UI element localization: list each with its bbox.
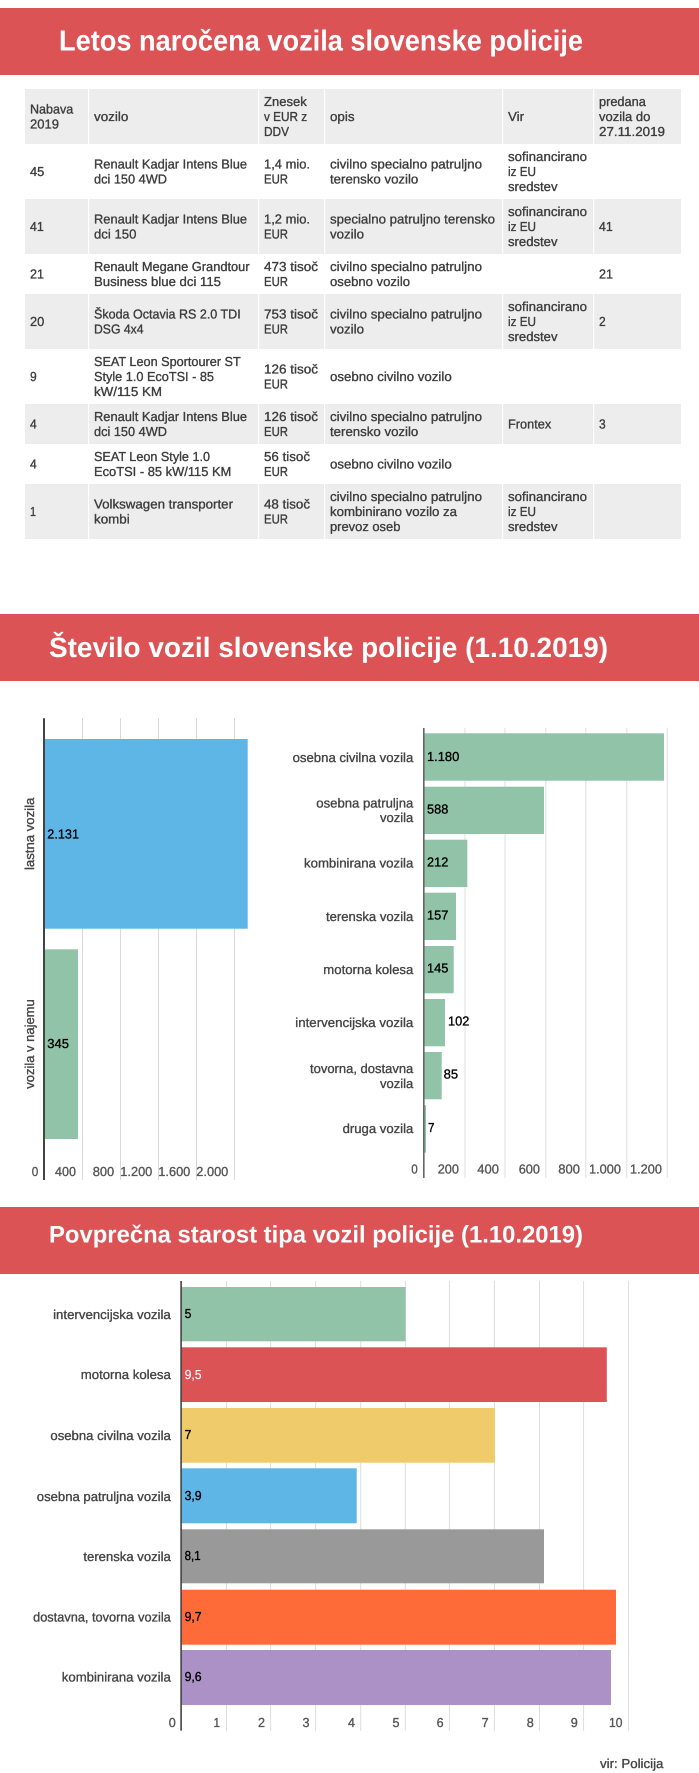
table row 7: 4 <box>30 456 37 472</box>
bar: terenska vozila: terenska vozila <box>326 909 414 924</box>
table row 4: sredstev <box>508 329 558 344</box>
bar: kombinirana vozila: 9,6 <box>185 1669 202 1684</box>
bar: motorna kolesa: 145 <box>427 961 448 976</box>
x axis labels: 0 <box>411 1162 418 1177</box>
bar: terenska vozila <box>326 893 456 940</box>
bar: intervencijska vozila: intervencijska vozila <box>53 1307 172 1322</box>
table header row: Znesek <box>264 94 307 109</box>
table row 6 <box>30 409 606 439</box>
table row 1: EUR <box>264 172 288 186</box>
table row 4: vozilo <box>330 322 364 336</box>
table row 5: SEAT Leon Sportourer ST <box>94 354 241 369</box>
x axis labels: 600 <box>519 1162 540 1177</box>
table row 2: vozilo <box>330 226 364 242</box>
x axis labels <box>411 1162 662 1177</box>
table header row: 2019 <box>30 116 59 132</box>
bar: dostavna, tovorna vozila: dostavna, tovorna vozila <box>33 1610 172 1625</box>
bar chart: povprečna starost <box>33 1281 629 1731</box>
bar: osebna civilna vozila <box>293 733 664 781</box>
table header row: DDV <box>264 124 289 139</box>
x axis labels: 3 <box>302 1715 310 1730</box>
x axis labels: 200 <box>438 1162 459 1177</box>
bar: motorna kolesa: motorna kolesa <box>323 962 414 977</box>
bar: intervencijska vozila: 102 <box>448 1014 469 1029</box>
table row 5: EUR <box>264 376 288 392</box>
table header row: Nabava <box>30 102 74 116</box>
table row 4: 753 tisoč <box>264 306 319 322</box>
table row 8: 1 <box>30 504 36 519</box>
table row 6: dci 150 4WD <box>94 424 167 439</box>
table row 6: 3 <box>599 416 606 432</box>
table header row: predana <box>599 94 647 109</box>
table row 5 <box>30 354 452 399</box>
table row 8: sofinancirano <box>508 489 587 504</box>
bar: osebna patruljna vozila: osebna patruljna <box>316 795 414 810</box>
bar: motorna kolesa <box>323 946 454 993</box>
bar: tovorna, dostavna vozila: 85 <box>444 1067 458 1082</box>
x axis labels: 1.200 <box>630 1162 662 1177</box>
table row 3: EUR <box>264 274 288 289</box>
bar: vozila v najemu <box>22 949 78 1139</box>
bar: lastna vozila <box>22 739 248 929</box>
table row 5: 126 tisoč <box>264 362 319 376</box>
bar: druga vozila: druga vozila <box>343 1121 414 1136</box>
x axis labels: 1 <box>214 1715 220 1730</box>
bar: motorna kolesa: motorna kolesa <box>81 1367 172 1382</box>
table row 3: 21 <box>30 266 44 282</box>
bar: osebna patruljna vozila: 3,9 <box>185 1488 202 1503</box>
bar: kombinirana vozila: 212 <box>427 855 448 870</box>
table row 4: civilno specialno patruljno <box>330 306 482 322</box>
table row 1: sofinancirano <box>508 149 587 164</box>
bar: osebna civilna vozila: 7 <box>185 1427 191 1442</box>
x axis labels: 5 <box>392 1715 400 1730</box>
table row 3: 21 <box>599 266 613 282</box>
bar: osebna civilna vozila: osebna civilna vozila <box>50 1428 172 1443</box>
bar: terenska vozila: 157 <box>427 908 448 923</box>
table row 8: EUR <box>264 512 288 526</box>
table row 8: Volkswagen transporter <box>94 496 234 512</box>
header: Povprečna starost <box>0 1207 699 1274</box>
bar: vozila v najemu: 345 <box>47 1036 69 1051</box>
table row 4: iz EU <box>508 314 536 329</box>
table row 5: 9 <box>30 369 37 384</box>
bar: osebna patruljna vozila <box>316 787 544 834</box>
table header row <box>30 94 665 139</box>
table row 8: kombinirano vozilo za <box>330 504 458 519</box>
bar: intervencijska vozila: intervencijska vozila <box>295 1015 414 1030</box>
table row 4 <box>30 299 606 344</box>
table row 1: Renault Kadjar Intens Blue <box>94 156 247 172</box>
header: Število vozil: Število vozil slovenske policije (1.10.2019) <box>49 631 608 663</box>
table header row: v EUR z <box>264 109 307 124</box>
x axis labels: 400 <box>477 1162 499 1177</box>
x axis labels: 1.200 <box>120 1164 152 1179</box>
table row 4: sofinancirano <box>508 299 587 314</box>
table row 2: sredstev <box>508 234 558 249</box>
table row 7: EcoTSI - 85 kW/115 KM <box>94 464 231 479</box>
bar: lastna vozila: lastna vozila <box>22 797 37 870</box>
bar: intervencijska vozila: 5 <box>185 1306 191 1321</box>
table row 2: EUR <box>264 226 288 242</box>
bar: dostavna, tovorna vozila <box>33 1590 616 1645</box>
x axis labels: 1.600 <box>158 1164 190 1179</box>
table header row: vozilo <box>94 109 128 124</box>
table row 1: civilno specialno patruljno <box>330 156 482 172</box>
x axis labels: 0 <box>169 1715 176 1730</box>
table row 8: prevoz oseb <box>330 519 400 534</box>
bar: osebna patruljna vozila: vozila <box>380 810 414 825</box>
header: Letos naročena vozila <box>0 8 699 75</box>
x axis labels: 10 <box>609 1715 622 1730</box>
table row 8: iz EU <box>508 504 536 519</box>
bar: vozila v najemu: vozila v najemu <box>22 999 37 1089</box>
bar: kombinirana vozila: kombinirana vozila <box>62 1670 172 1685</box>
bar: terenska vozila: terenska vozila <box>83 1549 172 1564</box>
bar chart: lastna vozila in vozila v najemu <box>22 718 248 1180</box>
table row 5: osebno civilno vozilo <box>330 369 452 384</box>
table row 6: civilno specialno patruljno <box>330 409 482 424</box>
bar: osebna civilna vozila <box>50 1408 495 1463</box>
table header row: 27.11.2019 <box>599 124 665 139</box>
table row 3: 473 tisoč <box>264 259 319 274</box>
x axis labels: 9 <box>571 1715 578 1730</box>
x axis labels: 6 <box>437 1715 444 1730</box>
bar: osebna civilna vozila: osebna civilna vozila <box>293 750 414 765</box>
x axis labels: 8 <box>527 1715 534 1730</box>
table row 2: iz EU <box>508 219 536 234</box>
header: Letos naročena vozila: Letos naročena vozila slovenske policije <box>59 26 583 58</box>
table row 6: terensko vozilo <box>330 424 418 439</box>
table row 7: SEAT Leon Style 1.0 <box>94 449 210 464</box>
table row 8: sredstev <box>508 519 558 534</box>
table row 6: Renault Kadjar Intens Blue <box>94 409 247 424</box>
table row 6: 4 <box>30 416 37 432</box>
table row 1: 45 <box>30 164 44 179</box>
bar: druga vozila: 7 <box>428 1120 434 1135</box>
table row 5: kW/115 KM <box>94 384 162 399</box>
table row 6: Frontex <box>508 416 552 432</box>
x axis labels: 2.000 <box>196 1164 228 1179</box>
table row 1: iz EU <box>508 164 536 179</box>
x axis labels: 7 <box>482 1715 489 1730</box>
table row 1: 1,4 mio. <box>264 156 310 172</box>
bar: tovorna, dostavna vozila <box>310 1052 458 1099</box>
table row 2: Renault Kadjar Intens Blue <box>94 212 247 226</box>
bar: intervencijska vozila <box>295 999 469 1046</box>
x axis labels: 4 <box>348 1715 355 1730</box>
bar: osebna patruljna vozila: 588 <box>427 802 448 817</box>
table row 7: EUR <box>264 464 288 479</box>
table row 8: civilno specialno patruljno <box>330 489 482 504</box>
table row 3: Renault Megane Grandtour <box>94 259 250 274</box>
table row 2: 41 <box>599 219 613 234</box>
table row 4: 2 <box>599 314 606 329</box>
x axis labels: 1.000 <box>589 1162 621 1177</box>
table row 1: dci 150 4WD <box>94 172 167 186</box>
table row 3: Business blue dci 115 <box>94 274 221 289</box>
table row 4: Škoda Octavia RS 2.0 TDI <box>94 306 241 322</box>
bar: tovorna, dostavna vozila: tovorna, dostavna <box>310 1061 414 1076</box>
x axis labels: 800 <box>558 1162 580 1177</box>
table row 2: 41 <box>30 219 44 234</box>
table row 6: EUR <box>264 424 288 439</box>
table: naročena vozila <box>25 89 681 539</box>
x axis labels: 800 <box>93 1164 114 1179</box>
table header row: opis <box>330 109 355 124</box>
bar chart: vrste vozil <box>293 728 667 1178</box>
table row 2: 1,2 mio. <box>264 212 310 226</box>
bar: terenska vozila: 8,1 <box>185 1548 201 1563</box>
bar: lastna vozila: 2.131 <box>47 826 79 841</box>
x axis labels: 0 <box>32 1164 38 1179</box>
bar: dostavna, tovorna vozila: 9,7 <box>185 1609 202 1624</box>
x axis labels: 2 <box>258 1715 265 1730</box>
table row 4: EUR <box>264 322 288 336</box>
table row 1: sredstev <box>508 179 558 194</box>
table row 2 <box>30 204 613 249</box>
header: Povprečna starost: Povprečna starost tipa vozil policije (1.10.2019) <box>49 1222 583 1249</box>
table row 2: sofinancirano <box>508 204 587 219</box>
table header row: vozila do <box>599 109 650 124</box>
bar: druga vozila <box>343 1105 434 1153</box>
bar: tovorna, dostavna vozila: vozila <box>380 1076 414 1091</box>
table row 8 <box>30 489 587 534</box>
table row 6: 126 tisoč <box>264 409 319 424</box>
table row 7: osebno civilno vozilo <box>330 456 452 472</box>
table row 7 <box>30 449 452 479</box>
x axis labels: 400 <box>55 1164 76 1179</box>
bar: osebna civilna vozila: 1.180 <box>427 749 459 764</box>
table row 8: 48 tisoč <box>264 496 311 512</box>
table row 5: Style 1.0 EcoTSI - 85 <box>94 369 214 384</box>
bar: kombinirana vozila <box>62 1650 611 1705</box>
table row 1 <box>30 149 587 194</box>
x axis labels <box>169 1715 622 1730</box>
table row 3: osebno vozilo <box>330 274 410 289</box>
table row 7: 56 tisoč <box>264 449 311 464</box>
bar: osebna patruljna vozila <box>37 1468 357 1523</box>
table row 4: 20 <box>30 314 44 329</box>
x axis labels <box>32 1164 228 1179</box>
table row 3: civilno specialno patruljno <box>330 259 482 274</box>
bar: osebna patruljna vozila: osebna patruljna vozila <box>37 1489 172 1504</box>
table row 3 <box>30 259 613 289</box>
header: Število vozil <box>0 614 699 681</box>
table row 2: dci 150 <box>94 226 136 242</box>
table row 1: terensko vozilo <box>330 172 418 186</box>
bar: terenska vozila <box>83 1529 544 1583</box>
source note: vir: Policija <box>600 1756 664 1771</box>
bar: intervencijska vozila <box>53 1287 406 1341</box>
bar: motorna kolesa <box>81 1347 607 1402</box>
bar: motorna kolesa: 9,5 <box>185 1367 202 1382</box>
bar: kombinirana vozila <box>304 840 467 887</box>
table row 2: specialno patruljno terensko <box>330 212 495 226</box>
table header row: Vir <box>508 109 525 124</box>
bar: kombinirana vozila: kombinirana vozila <box>304 856 414 871</box>
table row 8: kombi <box>94 512 130 526</box>
table row 4: DSG 4x4 <box>94 322 144 336</box>
